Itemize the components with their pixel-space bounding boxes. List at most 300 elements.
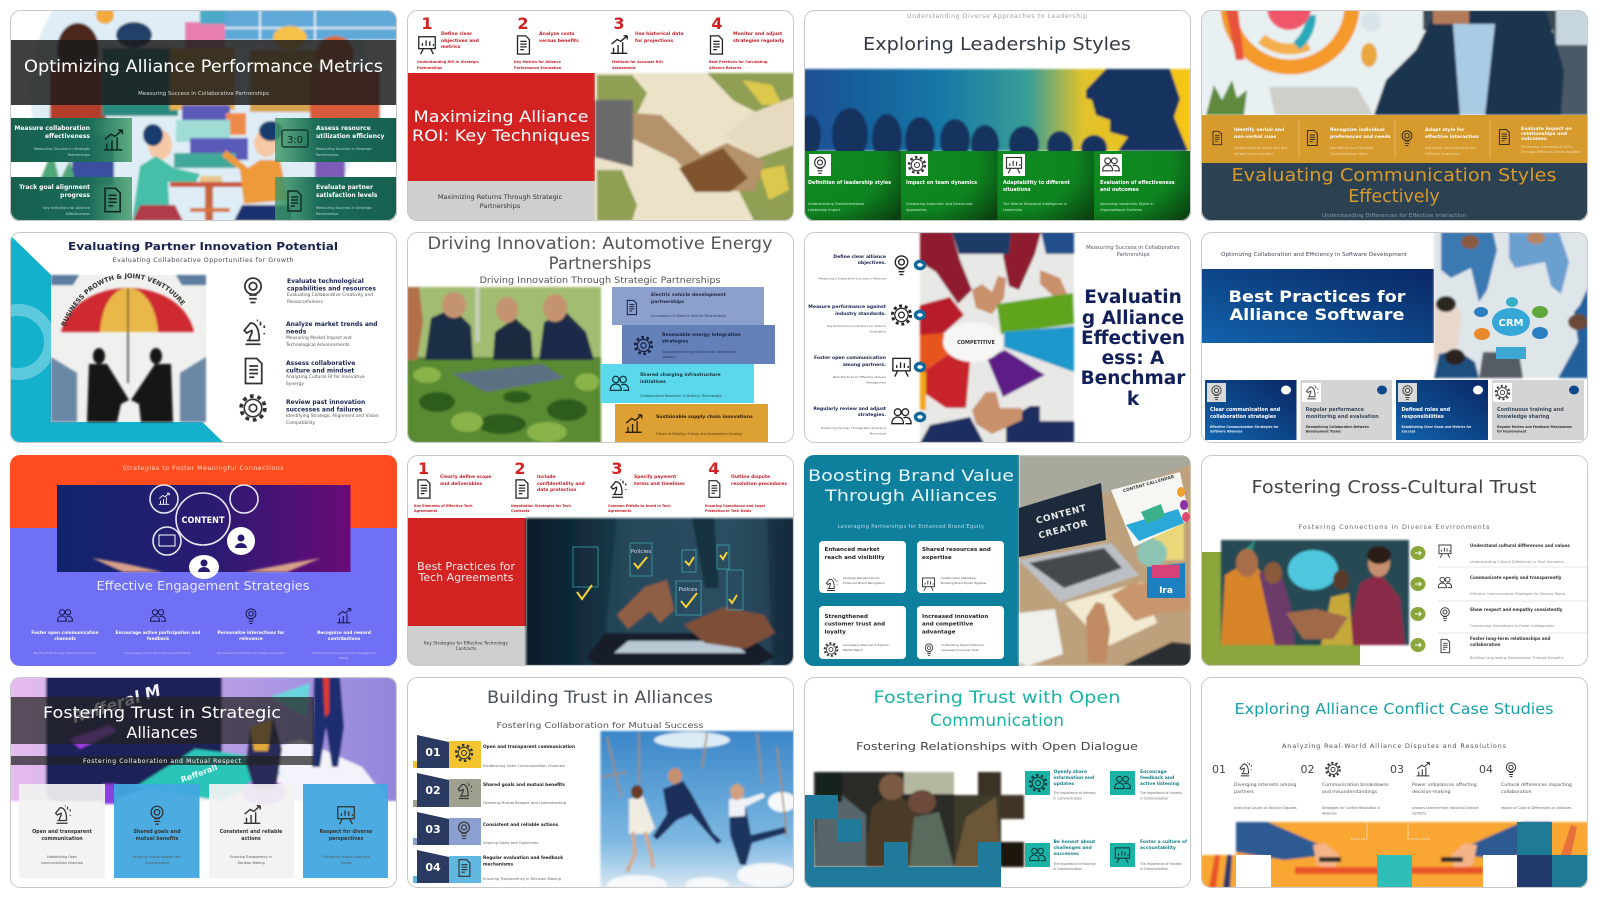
subtitle: Evaluating Collaborative Opportunities for Growth <box>112 257 294 264</box>
metric box: evaluate partner satisfaction levels: Evaluate partner <box>316 184 373 191</box>
tab text: Establishing Open Communication Channels <box>483 764 565 768</box>
numbered steps: for projections <box>635 38 673 44</box>
title <box>874 688 1120 731</box>
green feature columns: and outcomes <box>1100 187 1139 193</box>
numbered steps: 2 <box>517 14 529 33</box>
card: shared charging infrastructure initiatives: Collaborative Research in Battery Technology <box>640 394 722 398</box>
subtitle: Partnerships <box>1117 252 1150 258</box>
panel: Boosting Brand Value Through Alliances <box>804 455 1191 666</box>
objectives list: Enhancing Synergy Through Benchmarking <box>821 426 886 430</box>
photo: competitive wheel on table <box>920 232 1074 443</box>
numbered case columns: Impact of Cultural Differences on Alliances <box>1501 806 1572 810</box>
practice items: Encourage <box>1140 769 1167 775</box>
card: renewable energy integration strategies: Industry <box>662 355 676 359</box>
tab text: Consistent and reliable actions <box>483 822 559 828</box>
numbered steps: Common Pitfalls to Avoid in Tech <box>608 504 671 508</box>
practice cards <box>1205 380 1584 440</box>
title: g Alliance <box>1082 308 1184 329</box>
title <box>43 703 281 742</box>
numbered steps: Ensuring Compliance and Legal <box>705 504 765 508</box>
numbered case columns: and misunderstandings <box>1322 789 1378 795</box>
numbered steps: 4 <box>711 14 723 33</box>
orange key points band: Evaluate impact on <box>1521 126 1572 132</box>
panel: Evaluating Partner Innovation Potential <box>10 232 397 443</box>
numbered tabs: 03 <box>425 823 441 836</box>
key points text: Analyze market trends and <box>286 321 377 328</box>
green feature columns: Evaluation of effectiveness <box>1100 180 1175 186</box>
practice cards: monitoring and evaluation <box>1306 414 1379 420</box>
practice items: Openly share <box>1054 769 1087 775</box>
principle cards: perspectives <box>329 836 363 842</box>
list text: collaboration <box>1470 642 1501 647</box>
title: Evaluating Partner Innovation Potential <box>68 240 338 253</box>
list text: Foster long-term relationships and <box>1470 636 1551 641</box>
title: Tech Agreements <box>418 571 514 584</box>
practice cards: collaboration strategies <box>1210 414 1276 420</box>
objectives list: Best Practices for Effective Alliance <box>833 375 886 379</box>
photo: content creator desk: CONTENT CALLENDAR <box>1122 474 1176 494</box>
orange key points band: Adjusting Communication for <box>1425 146 1477 150</box>
title: Fostering Cross-Cultural Trust <box>1252 477 1536 498</box>
numbered case columns: Cultural differences impacting <box>1501 782 1572 788</box>
numbered case columns: Diverging interests among <box>1234 782 1296 788</box>
objective icons and markers <box>892 256 924 424</box>
benefit cards: and competitive <box>922 622 973 628</box>
objectives list: Measuring Collaborative Success in Alliances <box>819 276 886 280</box>
illustration: referral marketing platform <box>10 667 397 804</box>
strategy columns: Building Trust Through Open Communication <box>34 651 97 655</box>
practice cards: Streamlining Collaboration Between <box>1306 425 1369 429</box>
metric box: measure collaboration effectiveness: effectiveness <box>45 133 90 140</box>
icons <box>241 278 265 420</box>
card: renewable energy integration strategies: strategies <box>662 338 689 344</box>
panel: Building Trust in Alliances <box>407 677 797 895</box>
image: content cycle over hands: CONTENT <box>182 516 225 526</box>
numbered case columns: 01 <box>1212 763 1226 776</box>
subtitle <box>1086 245 1180 258</box>
numbered steps: Key Elements of Effective Tech <box>414 504 473 508</box>
numbered steps: 3 <box>611 459 623 478</box>
image: umbrella over handshake: BUSINESS PROWTH & JOINT VENTTUURE <box>61 273 186 326</box>
metric box: measure collaboration effectiveness: Measure collaboration <box>14 125 90 132</box>
orange key points band: Understanding Verbal and Non- <box>1234 146 1290 150</box>
card: renewable energy integration strategies <box>622 325 775 364</box>
orange key points band: Through Effective Communication <box>1520 150 1581 154</box>
panel: Maximizing Alliance ROI <box>407 10 794 221</box>
practice items: The Importance of Honesty <box>1139 862 1182 866</box>
title: Evaluating Communication Styles <box>1232 166 1556 186</box>
benefit cards <box>819 541 1004 659</box>
step icons <box>419 36 722 54</box>
objectives list: Regularly review and adjust <box>813 406 887 412</box>
numbered case columns: Communication breakdowns <box>1322 782 1389 788</box>
numbered steps: Alliance Returns <box>709 66 741 70</box>
card: renewable energy integration strategies: Renewable energy integration <box>662 332 741 338</box>
metric box: evaluate partner satisfaction levels <box>275 177 397 221</box>
list text: Understand cultural differences and values <box>1470 543 1570 548</box>
photo: competitive wheel on table: COMPETITIVE <box>957 340 995 346</box>
metric box: measure collaboration effectiveness: Partnerships <box>68 153 90 157</box>
orange key points band: outcomes <box>1521 136 1547 142</box>
card: electric vehicle development partnerships <box>612 287 764 325</box>
tab text: Open and transparent communication <box>483 744 575 750</box>
numbered steps: Contracts <box>511 509 529 513</box>
green feature columns <box>804 151 1191 221</box>
metric box: evaluate partner satisfaction levels: Partnerships <box>316 212 338 216</box>
practice items: accountability <box>1140 845 1176 851</box>
objectives list <box>808 254 887 436</box>
numbered steps: Agreements <box>608 509 631 513</box>
orange key points band: effective interaction <box>1425 134 1479 140</box>
numbered case columns: Conflicts <box>1412 812 1427 816</box>
panel: Evaluating Communication Styles Effectively <box>1201 0 1588 221</box>
photo: policies over tablet: Policies <box>631 549 651 555</box>
list text: Effective Communication Strategies for Diverse Teams <box>1470 592 1566 596</box>
photo: team around CRM table <box>1434 232 1588 378</box>
title: Benchmar <box>1081 368 1186 389</box>
green feature columns: Leadership <box>1003 208 1023 212</box>
numbered case columns: Power imbalances affecting <box>1412 782 1477 788</box>
subtitle: Leveraging Partnerships for Enhanced Brand Equity <box>838 524 984 530</box>
key points text: Review past innovation <box>286 399 365 406</box>
tab text: Aligning Goals and Objectives <box>483 841 538 845</box>
title: Optimizing Alliance Performance Metrics <box>24 57 383 77</box>
metric box: track goal alignment progress: Track goal alignment <box>19 184 90 191</box>
panel: Fostering Cross-Cultural Trust <box>1201 455 1588 666</box>
photo: business team over green energy model <box>407 287 601 443</box>
numbered steps: Performance Evaluation <box>514 66 562 70</box>
orange key points band: Identifying Your Personal <box>1330 146 1373 150</box>
numbered steps: 2 <box>514 459 526 478</box>
metric box: assess resource utilization efficiency: Partnerships <box>316 153 338 157</box>
title <box>1081 287 1186 410</box>
title <box>417 560 515 584</box>
metric box: assess resource utilization efficiency: 3:0 <box>287 135 303 146</box>
numbered steps: Outline dispute <box>731 474 770 480</box>
orange key points band: Recognize individual <box>1330 127 1385 133</box>
photo: team swinging on ropes <box>600 731 797 895</box>
photo: content creator desk: Ira <box>1159 586 1173 596</box>
green feature columns: Impact on team dynamics <box>906 180 977 186</box>
principle cards: Consistent and reliable <box>220 829 283 835</box>
grey subtitle block: Maximizing Returns Through Strategic <box>438 193 563 201</box>
green feature columns: situations <box>1003 187 1031 193</box>
numbered tabs <box>413 735 481 883</box>
panel: Fostering Trust with Open Communication <box>804 677 1191 888</box>
strategy columns: Encourage active participation and <box>116 630 200 636</box>
practice cards: Development Teams <box>1306 430 1341 434</box>
numbered steps: Partnerships <box>417 66 442 70</box>
numbered steps: Specify payment <box>634 474 677 480</box>
card: electric vehicle development partnerships: Innovations in Electric Vehicle Partnerships <box>651 314 726 318</box>
metric box: evaluate partner satisfaction levels: satisfaction levels <box>316 192 378 199</box>
principle cards: mutual benefits <box>136 836 179 842</box>
key points text: Synergy <box>286 381 304 387</box>
principle cards: Open and transparent <box>32 829 93 835</box>
metric box: assess resource utilization efficiency: utilization efficiency <box>316 133 385 140</box>
strategy columns: Efforts <box>339 656 349 660</box>
benefit cards: advantage <box>922 630 956 636</box>
numbered case columns <box>1212 762 1572 816</box>
principle cards: Decision-Making <box>237 861 265 865</box>
navy title band <box>1201 163 1588 221</box>
title: Best Practices for <box>417 560 515 573</box>
green feature columns: Leadership Impact <box>808 208 841 212</box>
orange key points band: non-verbal cues <box>1234 134 1276 140</box>
illustration: team stacking blocks <box>30 10 397 220</box>
title <box>414 110 590 144</box>
illustration: referral marketing platform: Refferall <box>180 763 219 784</box>
principle cards: Ensuring Transparency in <box>230 855 272 859</box>
numbered case columns: 02 <box>1300 763 1314 776</box>
grey subtitle block <box>407 626 526 666</box>
numbered steps: and deliverables <box>440 481 482 487</box>
numbered steps: Define clear <box>441 31 473 37</box>
practice cards: Regular performance <box>1306 407 1365 413</box>
benefit cards: customer trust and <box>824 622 885 628</box>
photo: content creator desk: CREATOR <box>1038 519 1089 541</box>
card: shared charging infrastructure initiatives: initiatives <box>640 379 666 385</box>
green feature columns: Organizational Contexts <box>1100 208 1142 212</box>
practice cards: responsibilities <box>1402 414 1444 420</box>
principle cards: Communication Channels <box>41 861 83 865</box>
practice items: in Communication <box>1140 867 1168 871</box>
numbered steps: versus benefits <box>539 38 579 44</box>
key points text: needs <box>286 328 307 336</box>
title: Boosting Brand Value <box>808 466 1014 485</box>
subtitle with band: Fostering Collaboration and Mutual Respect <box>83 758 242 765</box>
subtitle: Fostering Collaboration for Mutual Success <box>496 720 704 730</box>
subtitle: Understanding Differences for Effective Interaction <box>1322 213 1466 219</box>
subtitle with band <box>10 756 314 765</box>
objectives list: Techniques <box>868 432 886 436</box>
strategy columns: Personalize interactions for <box>217 630 285 636</box>
list text: Communicate openly and transparently <box>1470 575 1562 580</box>
objectives list: among partners. <box>843 362 886 368</box>
photo: policies over tablet <box>526 518 794 666</box>
practice items: Foster a culture of <box>1140 839 1187 845</box>
title: Effective Engagement Strategies <box>96 578 310 593</box>
key points text: culture and mindset <box>286 368 354 374</box>
principle cards: Shared goals and <box>133 829 181 835</box>
grey subtitle block: Contracts <box>456 646 477 652</box>
green feature columns: Adaptability to different <box>1003 180 1071 186</box>
panel: Effective Engagement Strategies <box>10 455 397 666</box>
subtitle: Strategies to Foster Meaningful Connections <box>122 465 284 472</box>
objectives list: Foster open communication <box>814 355 886 361</box>
title: Partnerships <box>549 254 651 273</box>
benefit cards: expertise <box>922 555 952 561</box>
objectives list: Management <box>866 380 887 384</box>
practice items: Be honest about <box>1054 839 1096 845</box>
benefit cards: Market Reach <box>843 648 863 652</box>
numbered steps: 1 <box>421 14 433 33</box>
list text: Show respect and empathy consistently <box>1470 607 1563 612</box>
title band <box>1201 269 1434 343</box>
green feature columns: Assessing Leadership Styles in <box>1100 202 1154 206</box>
objectives list: industry standards. <box>835 311 886 317</box>
photo: content creator desk <box>1019 455 1191 666</box>
key points text: Analyzing Cultural Fit for Innovative <box>286 374 365 380</box>
green feature columns: Definition of leadership styles <box>808 180 891 186</box>
card: electric vehicle development partnerships: Electric vehicle development <box>651 292 727 298</box>
benefit cards: Enhanced market <box>824 547 880 553</box>
subtitle: Driving Innovation Through Strategic Partnerships <box>480 276 721 286</box>
practice cards: knowledge sharing <box>1497 414 1550 420</box>
red title block <box>407 73 595 181</box>
metric box: measure collaboration effectiveness <box>10 118 132 162</box>
title: Alliances <box>126 723 198 742</box>
principle cards: Establishing Open <box>47 855 77 859</box>
practice cards: Continuous training and <box>1497 407 1564 413</box>
title: Effectively <box>1348 187 1440 207</box>
orange key points band: Enhancing Interactional Skills <box>1521 145 1573 149</box>
objectives list: Measure performance against <box>808 304 887 310</box>
list text: Understanding Cultural Differences in Trust Dynamics <box>1470 560 1564 564</box>
split background <box>10 455 397 666</box>
numbered case columns: decision-making <box>1412 789 1450 795</box>
objectives list: Evaluation <box>870 330 886 334</box>
panel: Driving Innovation Automotive Energy Partnerships <box>407 232 794 443</box>
title: Driving Innovation: Automotive Energy <box>428 234 773 253</box>
principle cards: communication <box>41 836 83 842</box>
principle cards: Understanding <box>145 861 169 865</box>
practice cards: Regular Review and Feedback Mechanisms <box>1497 425 1572 429</box>
numbered case columns: collaboration <box>1501 789 1532 795</box>
practice cards: Establishing Clear Goals and Metrics for <box>1402 425 1472 429</box>
practice items: challenges and <box>1054 845 1092 851</box>
card: sustainable supply chain innovations: Future of Mobility: Energy and Automotive Synergy <box>656 432 742 436</box>
photo: businessman with chart <box>1201 0 1588 115</box>
green feature columns: Approaches <box>906 208 927 212</box>
principle cards: Values <box>341 861 352 865</box>
benefit cards: Co-Branding Opportunities for <box>941 643 985 647</box>
metric box: track goal alignment progress <box>10 177 132 221</box>
tab text: Fostering Mutual Respect and Understanding <box>483 801 566 805</box>
numbered steps: Clearly define scope <box>440 474 491 480</box>
numbered tabs: 02 <box>425 784 441 797</box>
practice items: in Communication <box>1054 796 1082 800</box>
numbered steps: Negotiation Strategies for Tech <box>511 504 572 508</box>
dark title band <box>10 40 397 105</box>
key points text: Evaluate technological <box>287 278 364 285</box>
panel: Evaluating Alliance Effectiveness <box>804 232 1191 443</box>
metric box: track goal alignment progress: Key Indicators for Alliance <box>43 206 91 210</box>
illustration: referral marketing platform: Refferal M <box>70 680 163 727</box>
title: Evaluatin <box>1084 287 1182 308</box>
orange key points band: Different Audiences <box>1425 152 1460 156</box>
numbered case columns: Alliances <box>1322 812 1337 816</box>
numbered steps: Protection in Tech Deals <box>705 509 751 513</box>
key points text: Evaluating Collaborative Creativity and <box>287 292 373 298</box>
benefit cards: Enhanced Brand Recognition <box>843 581 885 585</box>
subtitle: Fostering Relationships with Open Dialogue <box>856 741 1138 753</box>
card: sustainable supply chain innovations: Sustainable supply chain innovations <box>656 414 753 420</box>
numbered steps: 3 <box>613 14 625 33</box>
strategy columns: Utilizing Technology to Enhance Engagement <box>312 651 376 655</box>
orange key points band: preferences and needs <box>1330 134 1391 140</box>
numbered steps: Monitor and adjust <box>733 31 783 37</box>
numbered case columns: 03 <box>1390 763 1404 776</box>
orange key points band: Verbal Communication <box>1234 152 1274 156</box>
benefit cards: reach and visibility <box>824 555 885 561</box>
key points text: Resourcefulness <box>287 299 323 305</box>
strategy columns: feedback <box>147 636 169 642</box>
green feature columns: The Role of Emotional Intelligence in <box>1002 202 1067 206</box>
metric box: measure collaboration effectiveness: Measuring Success in Strategic <box>34 147 90 151</box>
numbered case columns: partners <box>1234 789 1254 795</box>
benefit cards: Leveraging Alliances to Expand <box>843 643 889 647</box>
tab text: mechanisms <box>483 862 513 868</box>
key points text: Measuring Market Impact and <box>286 335 352 341</box>
numbered steps: strategies regularly <box>733 38 784 44</box>
practice items: information and <box>1054 775 1094 781</box>
strategy columns: Personalizing Interactions for Deeper Connection <box>217 651 286 655</box>
card: shared charging infrastructure initiatives: Shared charging infrastructure <box>640 372 721 378</box>
numbered steps: data protection <box>537 487 576 493</box>
numbered steps: resolution procedures <box>731 481 787 487</box>
strategy columns: Encouraging Active Participation and Feedback <box>125 651 191 655</box>
numbered steps: confidentiality and <box>537 481 585 487</box>
title: k <box>1127 389 1140 410</box>
numbered case columns: Strategies for Conflict Resolution in <box>1322 806 1380 810</box>
benefit cards: Boosting Brand Equity Together <box>941 581 988 585</box>
practice cards: Defined roles and <box>1402 407 1451 413</box>
numbered steps: Analyze costs <box>539 31 575 37</box>
tab text: Regular evaluation and feedback <box>483 855 563 861</box>
subtitle: Measuring Success in Collaborative <box>1086 245 1180 251</box>
numbered steps: Understanding ROI in Strategic <box>417 60 479 64</box>
benefit cards: Strengthened <box>824 614 868 620</box>
title: Exploring Alliance Conflict Case Studies <box>1234 700 1554 718</box>
numbered case columns: Lessons Learned from Historical Alliance <box>1412 806 1479 810</box>
title: Fostering Trust in Strategic <box>43 703 281 722</box>
orange key points band: Identify verbal and <box>1234 127 1284 133</box>
practice items: feedback and <box>1140 775 1174 781</box>
orange key points band <box>1201 115 1588 163</box>
numbered case columns: Analyzing Causes of Alliance Disputes <box>1234 806 1297 810</box>
title <box>428 234 773 273</box>
orange key points band: Communication Style <box>1330 152 1368 156</box>
metric box: evaluate partner satisfaction levels: Measuring Success in Strategic <box>316 206 372 210</box>
numbered steps: Methods for Accurate ROI <box>612 60 663 64</box>
arrow markers <box>1410 546 1426 652</box>
image: leader silhouette and crowd <box>805 67 1190 151</box>
numbered steps <box>417 14 784 70</box>
practice cards: Clear communication and <box>1210 407 1281 413</box>
numbered case columns: 04 <box>1479 763 1493 776</box>
panel: Exploring Leadership Styles <box>799 10 1191 221</box>
numbered steps: metrics <box>441 44 461 50</box>
objectives list: strategies. <box>858 412 886 418</box>
title: Building Trust in Alliances <box>487 688 713 707</box>
title: Maximizing Alliance <box>414 107 588 126</box>
photo: handshake over map <box>595 73 794 221</box>
numbered steps: Best Practices for Calculating <box>709 60 768 64</box>
numbered steps: Use historical data <box>635 31 684 37</box>
metric box: assess resource utilization efficiency: Measuring Success in Strategic <box>316 147 372 151</box>
benefit cards: Increased innovation <box>922 614 988 620</box>
green feature columns: Understanding Transformational <box>808 202 864 206</box>
green feature columns: Comparing Autocratic and Democratic <box>906 202 973 206</box>
panel: Exploring Alliance Conflict Case Studies <box>1201 677 1588 888</box>
card: sustainable supply chain innovations <box>615 404 768 443</box>
key points text: successes and failures <box>286 406 363 414</box>
subtitle: Fostering Connections in Diverse Environments <box>1298 523 1490 531</box>
title <box>1232 166 1556 207</box>
card: renewable energy integration strategies: Sustainable Energy Solutions for Automotive <box>662 350 736 354</box>
title band: Alliance Software <box>1230 305 1405 324</box>
